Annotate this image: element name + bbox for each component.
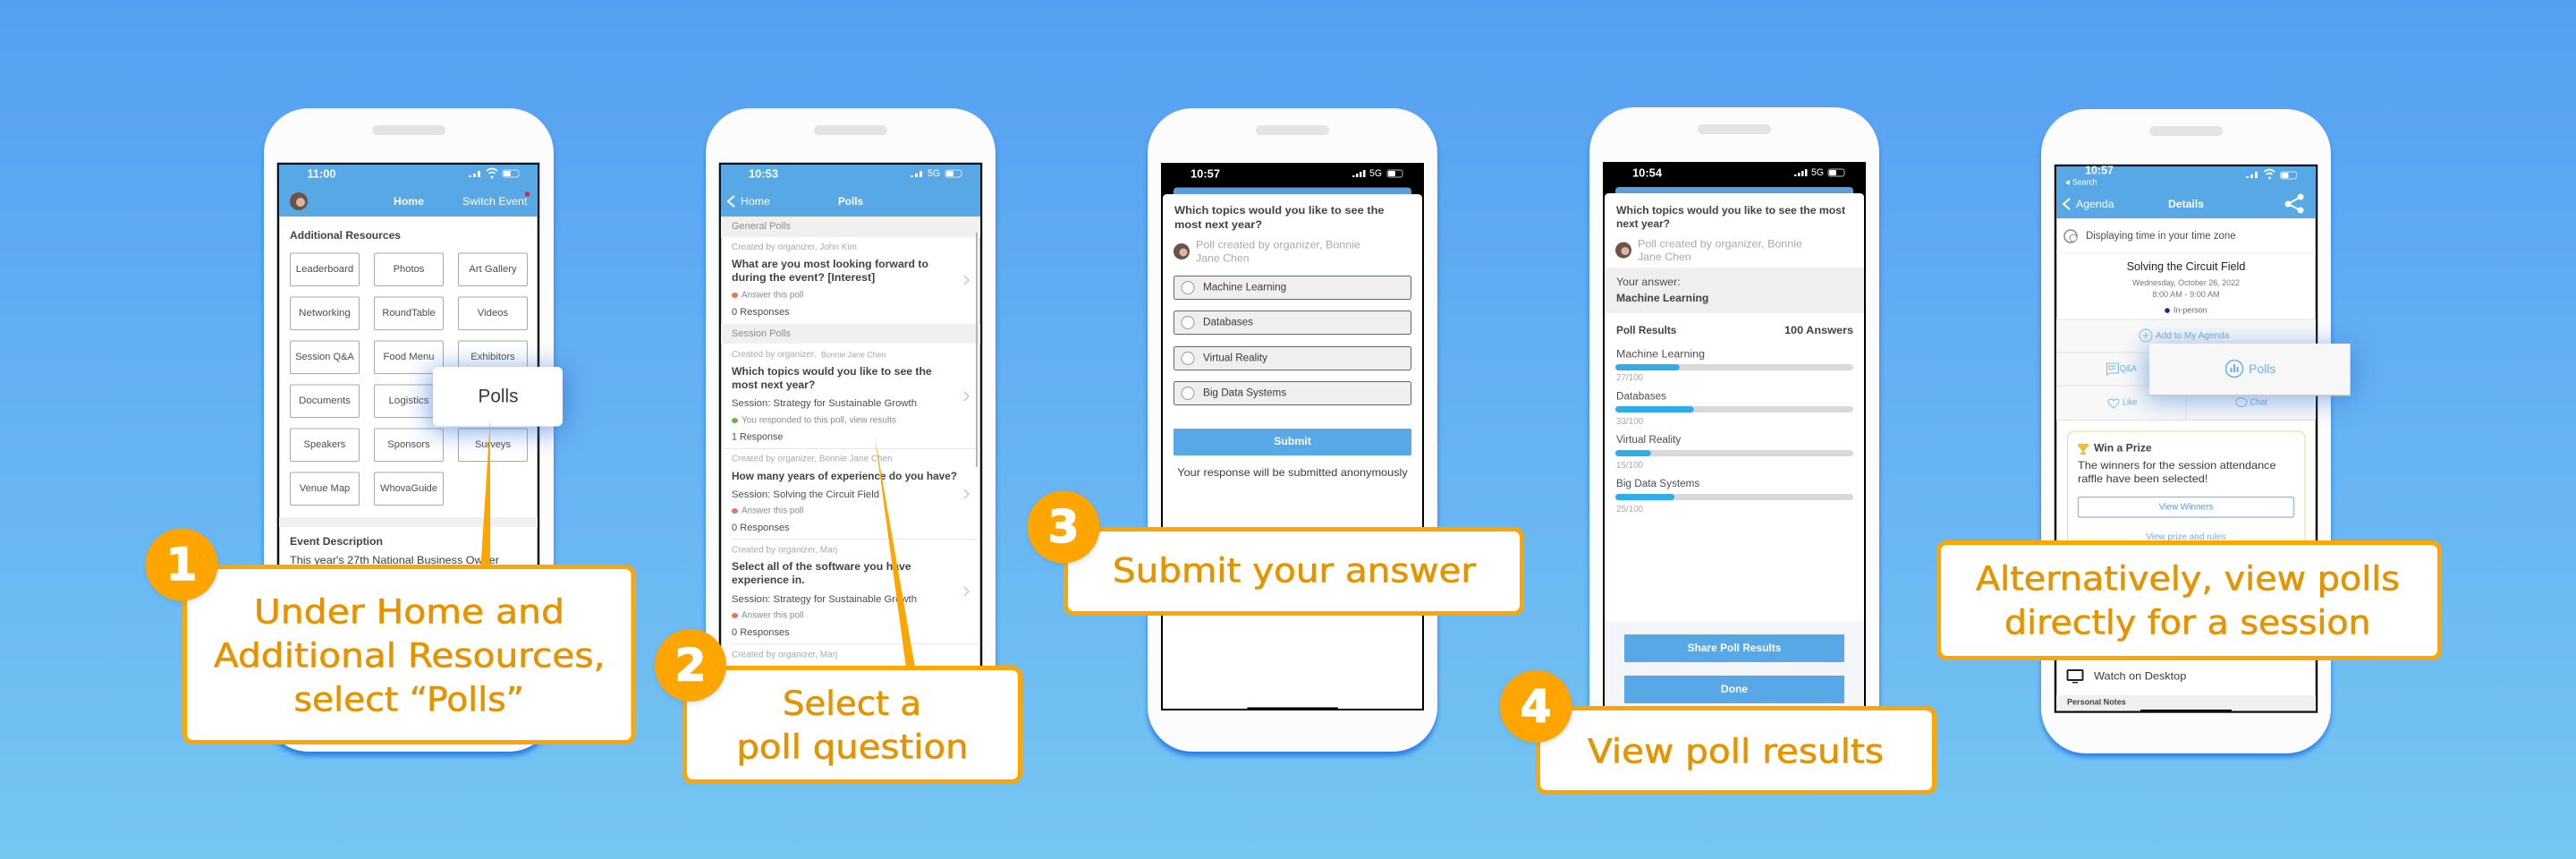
poll: software experience: 0 Responses xyxy=(732,627,790,638)
submit button xyxy=(1174,429,1411,455)
session action grid: Chat xyxy=(2250,397,2267,408)
resource button labels: Food Menu xyxy=(383,352,435,362)
app header xyxy=(279,165,538,217)
win a prize card: View Winners xyxy=(2159,502,2213,513)
badge 1: 1 xyxy=(166,539,197,591)
callout 5: directly for a session xyxy=(2004,603,2371,642)
poll question: Which topics would you like to see the xyxy=(1174,206,1385,217)
resource button labels: Leaderboard xyxy=(296,264,353,275)
event description xyxy=(290,535,499,566)
win a prize card: The winners for the session attendance xyxy=(2078,459,2276,472)
your answer band: Machine Learning xyxy=(1616,293,1708,304)
poll: years of experience xyxy=(732,455,957,533)
time zone row xyxy=(2056,230,2316,253)
session info: Wednesday, October 26, 2022 xyxy=(2132,278,2240,288)
resource button grid xyxy=(290,253,528,505)
poll: years of experience: Session: Solving the Circuit Field xyxy=(732,489,879,500)
poll: years of experience: Created by organizer, Bonnie Jane Chen xyxy=(732,455,893,464)
resource button labels: Sponsors xyxy=(387,439,430,450)
general polls section: General Polls xyxy=(732,221,791,232)
resource button labels: Surveys xyxy=(475,439,511,450)
phone 2: polls list xyxy=(706,108,996,756)
your answer band: Your answer: xyxy=(1616,277,1681,288)
poll: years of experience: How many years of experience do you have? xyxy=(732,472,957,482)
chevrons and scrollbar xyxy=(964,233,978,596)
badge 3: 3 xyxy=(1048,501,1079,553)
callout 2 xyxy=(685,437,1020,782)
poll question xyxy=(1174,206,1385,265)
poll: software experience: Select all of the software you have xyxy=(732,562,911,573)
poll question: Jane Chen xyxy=(1196,252,1250,265)
session action grid: Like xyxy=(2123,397,2138,408)
phone 1: home screen xyxy=(264,108,554,756)
callout 5 xyxy=(1939,542,2440,659)
poll results header xyxy=(1616,326,1853,336)
personal notes band xyxy=(2056,695,2316,711)
answer options xyxy=(1174,276,1411,404)
session action grid xyxy=(2056,319,2316,421)
phone 4: poll results xyxy=(1589,107,1879,755)
resource button labels: Documents xyxy=(299,395,351,406)
app header: Polls xyxy=(838,195,863,208)
poll: software experience: experience in. xyxy=(732,575,805,586)
phone 3: submit answer xyxy=(1148,108,1437,756)
resource button labels: Art Gallery xyxy=(469,264,517,275)
answer options: Big Data Systems xyxy=(1203,388,1286,399)
action buttons: Done xyxy=(1721,685,1748,695)
poll question: Jane Chen xyxy=(1638,251,1691,263)
app header: Search xyxy=(2072,177,2097,188)
win a prize card: raffle have been selected! xyxy=(2078,472,2207,485)
session action grid: Q&A xyxy=(2120,364,2137,374)
polls popup 1: Polls xyxy=(478,387,519,406)
resource button labels: WhovaGuide xyxy=(380,483,437,494)
callout 5: Alternatively, view polls xyxy=(1976,560,2400,598)
session polls section xyxy=(721,324,980,442)
callout 3: Submit your answer xyxy=(1113,551,1477,591)
session polls section: You responded to this poll, view results xyxy=(741,415,896,426)
callout 1 xyxy=(184,419,633,743)
app header: 5G xyxy=(928,168,940,179)
watch on desktop row xyxy=(2068,670,2187,684)
session action grid: Add to My Agenda xyxy=(2156,330,2229,341)
polls popup 1 xyxy=(429,367,566,431)
results bar chart: 25/100 xyxy=(1616,505,1643,515)
general polls section: Created by organizer, John Kim xyxy=(732,242,857,252)
general polls section: during the event? [Interest] xyxy=(732,273,875,284)
your answer band xyxy=(1605,268,1864,313)
results bar chart: Virtual Reality xyxy=(1616,435,1682,446)
watch on desktop row: Watch on Desktop xyxy=(2094,670,2187,683)
poll question: most next year? xyxy=(1174,220,1262,231)
results bar chart: Databases xyxy=(1616,391,1666,402)
session polls section: Which topics would you like to see the xyxy=(732,367,932,378)
status bar: 5G xyxy=(1811,167,1824,178)
time zone row: Displaying time in your time zone xyxy=(2086,231,2236,242)
session polls section: 1 Response xyxy=(732,431,783,442)
results bar chart xyxy=(1615,349,1853,515)
polls popup 2: Polls xyxy=(2249,361,2275,376)
status bar xyxy=(1632,166,1844,179)
resource button labels: Session Q&A xyxy=(295,352,354,362)
callout 3 xyxy=(1066,530,1522,614)
callout 1: Under Home and xyxy=(254,592,564,632)
phone 2: polls list: Created by organizer, Marj xyxy=(732,650,837,660)
status bar: 10:54 xyxy=(1632,166,1663,179)
badge 3 xyxy=(1027,490,1100,566)
event description: Event Description xyxy=(290,535,383,548)
resource button labels: Speakers xyxy=(304,439,346,450)
session polls section: Session: Strategy for Sustainable Growth xyxy=(732,398,917,409)
action buttons: Share Poll Results xyxy=(1688,643,1781,654)
session polls section: Session Polls xyxy=(732,328,791,339)
results bar chart: 27/100 xyxy=(1616,373,1643,383)
poll question xyxy=(1615,206,1845,263)
poll question: Which topics would you like to see the most xyxy=(1616,206,1845,217)
win a prize card: Win a Prize xyxy=(2094,442,2152,455)
callout 1: select “Polls” xyxy=(293,680,524,719)
session info: In-person xyxy=(2174,306,2207,315)
badge 2 xyxy=(655,629,726,703)
general polls section xyxy=(721,217,980,318)
results bar chart: 15/100 xyxy=(1616,461,1643,471)
session polls section: Created by organizer, xyxy=(732,350,816,360)
resource button labels: Venue Map xyxy=(300,483,350,494)
answer options: Databases xyxy=(1203,317,1253,327)
callout 4: View poll results xyxy=(1588,732,1884,771)
poll: software experience: Session: Strategy for Sustainable Growth xyxy=(732,594,917,605)
general polls section: What are you most looking forward to xyxy=(732,259,928,270)
app header xyxy=(721,165,980,217)
session polls section: Bonnie Jane Chen xyxy=(821,351,886,360)
session info xyxy=(2127,260,2245,315)
resource button labels: Photos xyxy=(394,264,425,275)
poll: years of experience: 0 Responses xyxy=(732,523,790,533)
status bar: 5G xyxy=(1369,168,1382,179)
win a prize card: View prize and rules xyxy=(2146,532,2226,542)
personal notes band: Personal Notes xyxy=(2067,698,2126,707)
app header: 10:57 xyxy=(2085,163,2114,177)
app header: Switch Event xyxy=(462,195,528,208)
poll: software experience xyxy=(732,546,917,638)
app header: 11:00 xyxy=(308,166,336,181)
resource button labels: RoundTable xyxy=(382,308,436,319)
callout 2: Select a xyxy=(783,685,921,723)
phone 5: session details xyxy=(2041,109,2331,757)
results bar chart: 33/100 xyxy=(1616,417,1643,427)
badge 1 xyxy=(145,528,218,603)
poll: years of experience: Answer this poll xyxy=(741,506,803,515)
app header: Details xyxy=(2168,198,2204,210)
answer options: Machine Learning xyxy=(1203,283,1286,293)
resource button labels: Networking xyxy=(299,308,351,319)
answer options: Virtual Reality xyxy=(1203,353,1267,363)
poll question: next year? xyxy=(1616,219,1670,230)
status bar: 10:57 xyxy=(1191,166,1220,181)
resource button labels: Exhibitors xyxy=(470,352,515,362)
badge 2: 2 xyxy=(675,639,706,691)
status bar xyxy=(1191,166,1402,181)
session info: 8:00 AM - 9:00 AM xyxy=(2152,290,2220,300)
app header: 10:53 xyxy=(749,166,778,181)
poll: software experience: Answer this poll xyxy=(741,610,803,621)
poll question: Poll created by organizer, Bonnie xyxy=(1196,239,1360,251)
poll question: Poll created by organizer, Bonnie xyxy=(1638,237,1802,250)
poll: software experience: Created by organizer, Marj xyxy=(732,546,837,555)
callout 4 xyxy=(1538,709,1934,793)
polls popup 2 xyxy=(2146,344,2354,401)
additional resources heading: Additional Resources xyxy=(290,229,401,242)
app header: Home xyxy=(394,195,424,208)
general polls section: Answer this poll xyxy=(741,290,803,301)
resource button labels xyxy=(295,264,517,494)
submit button: Submit xyxy=(1274,437,1311,447)
session info: Solving the Circuit Field xyxy=(2127,260,2245,273)
callout 2: poll question xyxy=(736,728,969,766)
results bar chart: Big Data Systems xyxy=(1616,479,1700,489)
results bar chart: Machine Learning xyxy=(1616,349,1705,360)
poll results header: 100 Answers xyxy=(1784,326,1853,336)
general polls section: 0 Responses xyxy=(732,307,790,318)
win a prize card xyxy=(2068,431,2305,557)
badge 4 xyxy=(1499,670,1572,744)
anonymity note: Your response will be submitted anonymously xyxy=(1177,466,1408,479)
event description: This year's 27th National Business Owner xyxy=(290,554,499,566)
app header: Home xyxy=(741,195,770,208)
badge 4: 4 xyxy=(1521,680,1551,732)
resource button labels: Videos xyxy=(478,308,509,319)
resource button labels: Logistics xyxy=(388,395,429,406)
app header: Agenda xyxy=(2076,198,2114,210)
action buttons xyxy=(1605,621,1864,708)
poll results header: Poll Results xyxy=(1616,326,1676,336)
callout 1: Additional Resources, xyxy=(214,637,605,675)
session polls section: most next year? xyxy=(732,380,815,391)
app header xyxy=(2056,163,2316,218)
